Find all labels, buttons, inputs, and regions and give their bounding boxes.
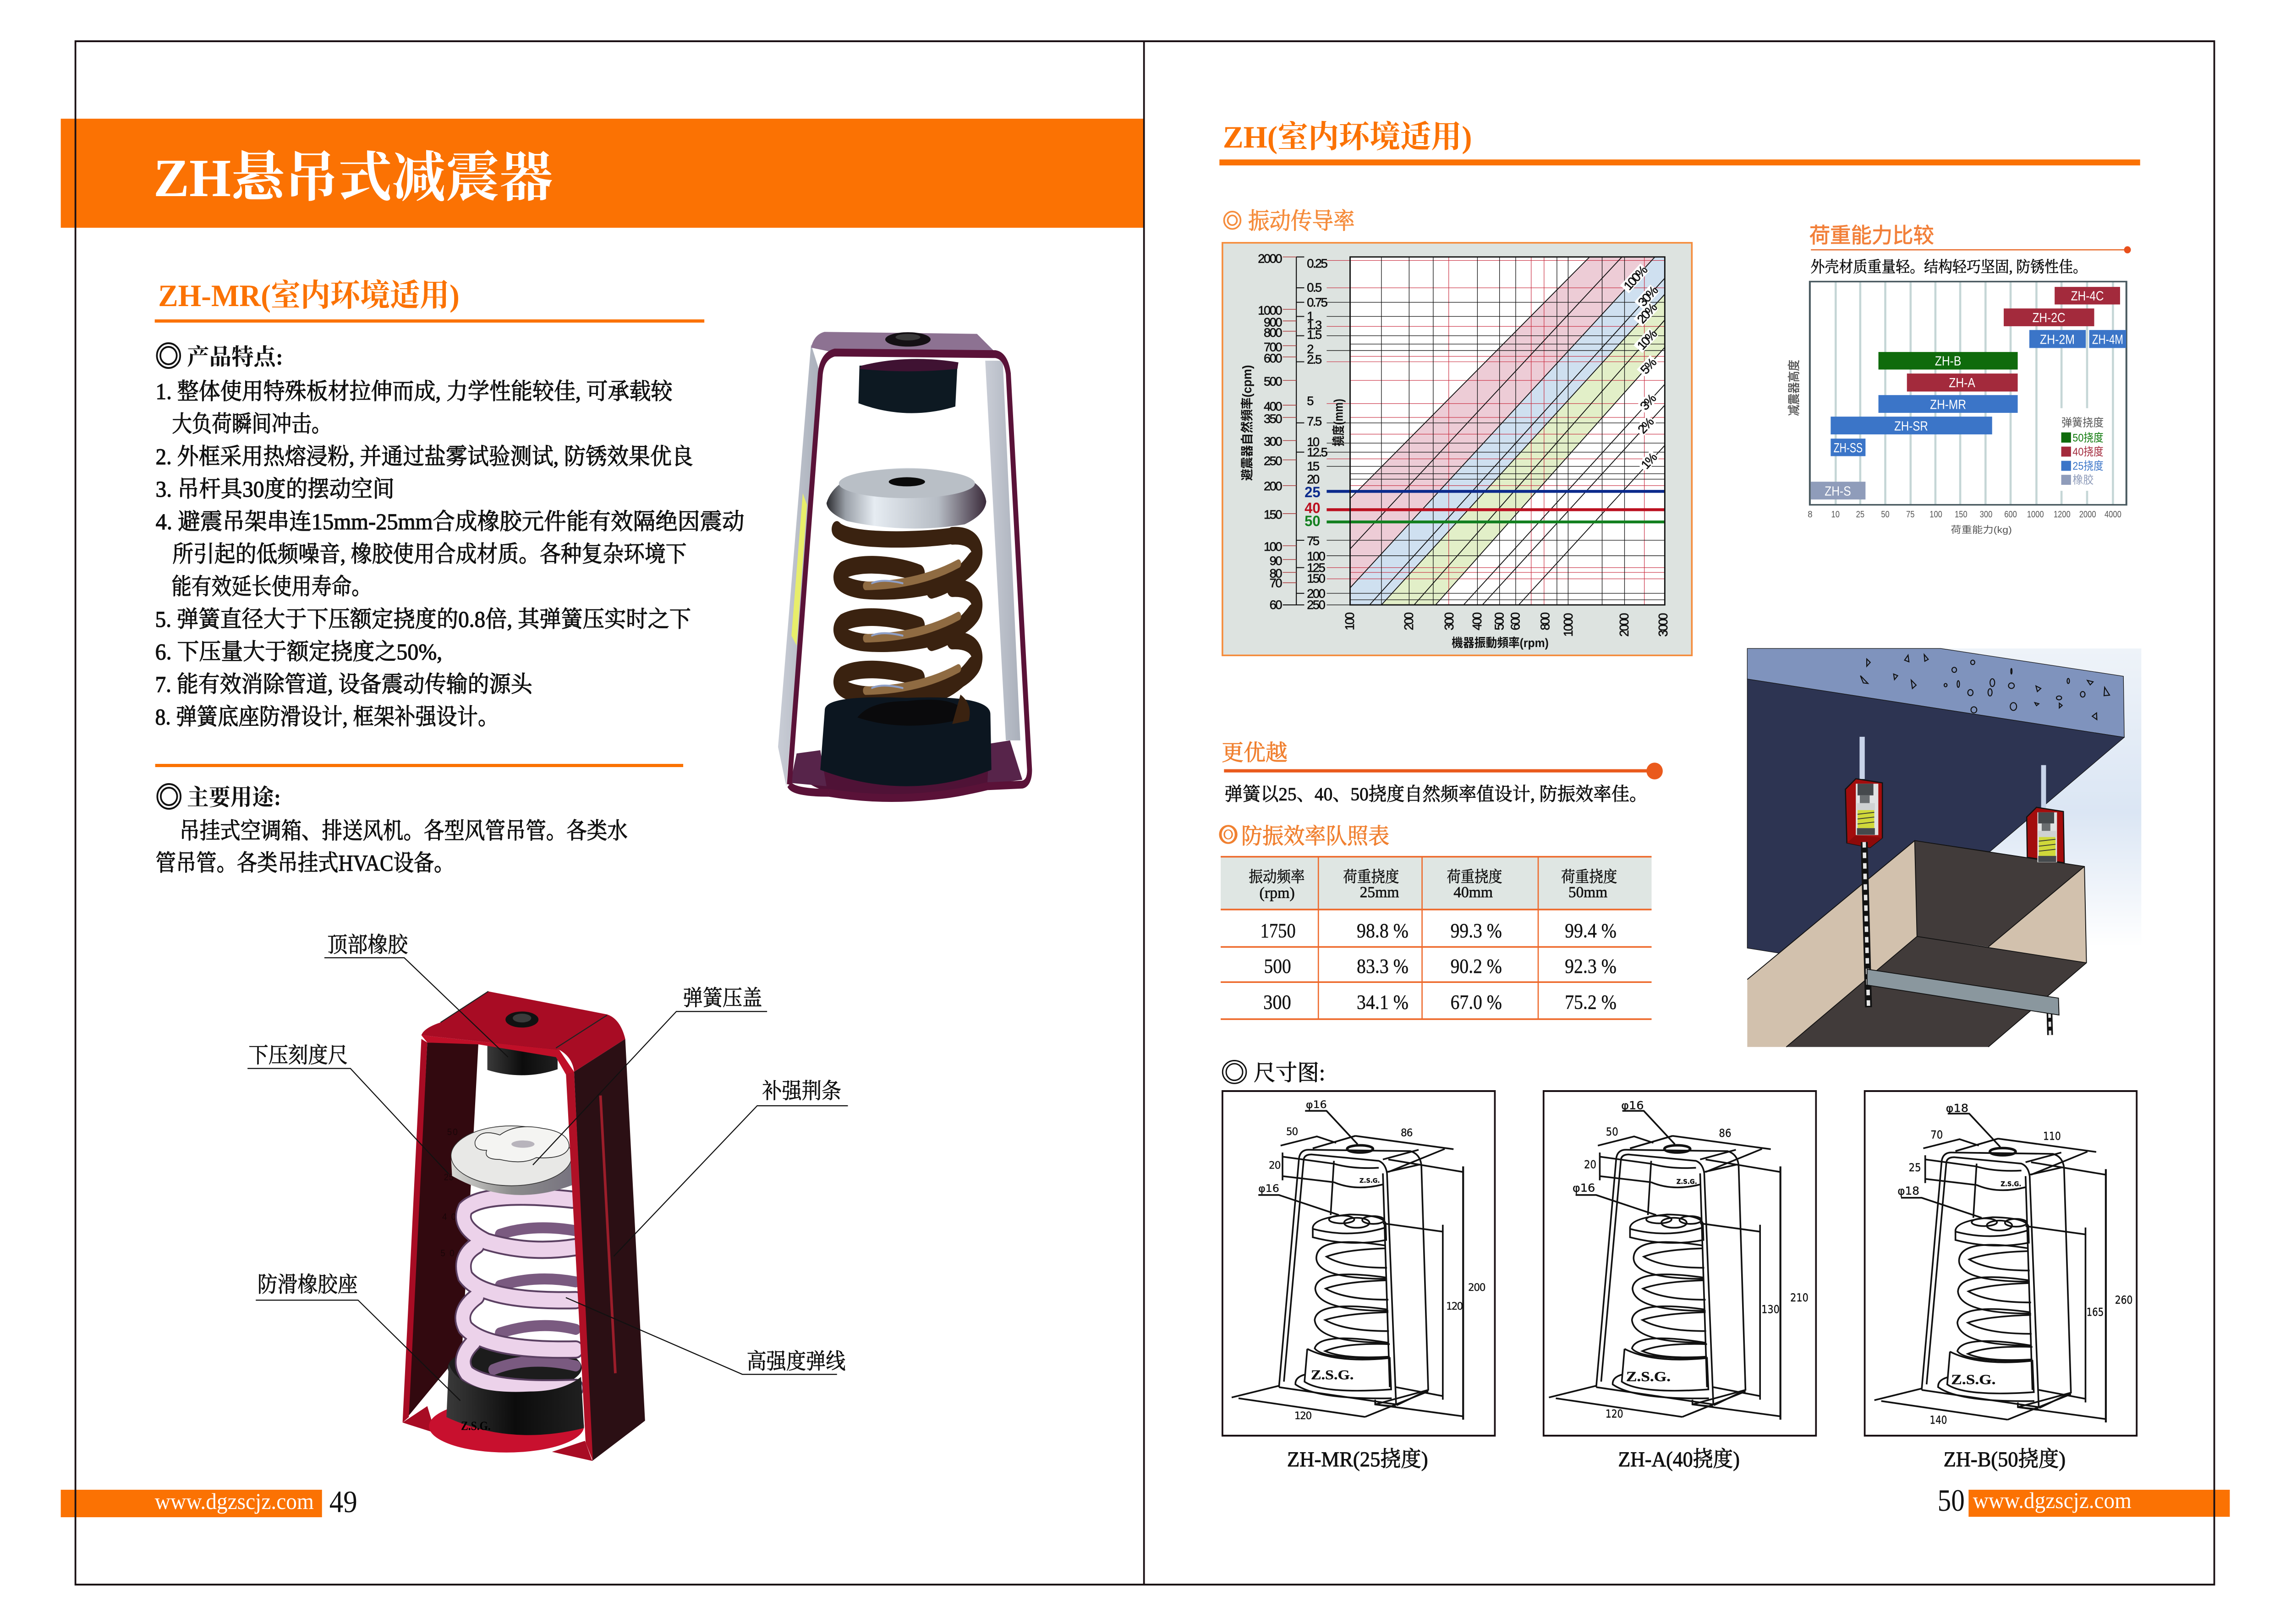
- bars: ZH-SR: [1894, 418, 1928, 433]
- frame strip: [789, 352, 1030, 798]
- axis titles: 機器振動頻率(rpm): [1452, 636, 1549, 650]
- exploded product diagram with callouts: Z.S.G.: [461, 1419, 491, 1433]
- natural frequency scale: 350: [1264, 412, 1282, 426]
- base plate: [802, 745, 1004, 801]
- slab underside: [1747, 679, 2124, 953]
- callout: spring wire: 高强度弹线: [746, 1349, 845, 1374]
- x axis labels: 4000: [2105, 509, 2121, 520]
- table title: 防振效率队照表: [1241, 824, 1389, 849]
- base feet: [403, 1406, 434, 1432]
- dimension drawing: ZH-B: Z.S.G.: [2001, 1180, 2021, 1188]
- footer left: 49: [329, 1485, 357, 1519]
- deflection scale: 15: [1307, 460, 1319, 473]
- bars: ZH-SS: [1834, 440, 1863, 455]
- rubber base: [820, 697, 992, 786]
- caption: ZH-B(50挠度): [1944, 1447, 2066, 1471]
- x axis title: 荷重能力(kg): [1951, 525, 2012, 535]
- footer left: [61, 1485, 357, 1519]
- dimension drawing: ZH-B: 260: [2115, 1293, 2132, 1306]
- dimension drawing: ZH-B: 140: [1929, 1413, 1947, 1426]
- icon: double ring: [1222, 1061, 1246, 1083]
- caption: ZH-MR(25挠度): [1287, 1447, 1428, 1471]
- heading rule: [1811, 246, 2131, 253]
- deflection scale: 7.5: [1307, 415, 1321, 428]
- description: 弹簧以25、40、50挠度自然频率值设计, 防振效率佳。: [1225, 784, 1647, 804]
- x axis labels: 100: [1929, 509, 1942, 520]
- x axis values: 400: [1470, 613, 1484, 631]
- washer: [451, 1150, 572, 1195]
- panel: vibration transmissibility chart: 撓度(mm): [1332, 399, 1346, 446]
- dimension drawing: ZH-A: Z.S.G.: [1677, 1178, 1697, 1185]
- dimension drawing: ZH-MR: [1222, 1091, 1495, 1471]
- chart frame: [1810, 281, 2127, 505]
- base disc: [429, 1400, 584, 1453]
- natural frequency scale: 400: [1264, 400, 1282, 413]
- text block: product features: 8. 弹簧底座防滑设计, 框架补强设计。: [155, 704, 499, 730]
- scale marks: 50: [447, 1127, 458, 1137]
- legend: 50挠度: [2072, 432, 2104, 444]
- threaded rods: [1864, 842, 2050, 1035]
- dimension drawing: ZH-A: 50: [1606, 1125, 1618, 1138]
- percent labels: 5%: [1638, 356, 1659, 377]
- efficiency table: 振动频率: [1249, 868, 1305, 886]
- percent labels: 2%: [1635, 415, 1657, 436]
- legend: 橡胶: [2072, 474, 2094, 486]
- efficiency table: 1750: [1261, 920, 1296, 942]
- x axis values: 300: [1442, 613, 1456, 631]
- deflection scale: 2.5: [1307, 353, 1321, 367]
- highlighted deflection values: 40: [1304, 499, 1321, 516]
- x axis values: 800: [1538, 613, 1552, 631]
- efficiency table: 99.4 %: [1565, 920, 1617, 942]
- chart title: 振动传导率: [1248, 208, 1355, 235]
- text block: main uses: 管吊管。各类吊挂式HVAC设备。: [156, 851, 455, 876]
- dimension drawing: ZH-B: Z.S.G.: [1951, 1372, 1996, 1388]
- efficiency table: [1221, 857, 1651, 1019]
- percent labels: 100%: [1621, 263, 1650, 293]
- dimension drawing: ZH-B: 70: [1930, 1128, 1943, 1141]
- diagonal lines: [1350, 257, 1665, 605]
- dimension drawing: ZH-A: 210: [1790, 1291, 1809, 1304]
- natural frequency scale: 800: [1264, 326, 1282, 340]
- text block: product features: 2. 外框采用热熔浸粉, 并通过盐雾试验测试, 防锈效果优良: [156, 444, 693, 469]
- installation illustration: duct hung from slab: [1747, 648, 2141, 1047]
- bars: ZH-MR: [1930, 397, 1966, 412]
- dimension drawing: ZH-MR: φ16: [1306, 1099, 1327, 1111]
- right heading: [1219, 120, 2140, 165]
- text block: main uses: 主要用途:: [187, 785, 281, 810]
- scale marks: 50: [440, 1248, 455, 1259]
- deflection lines: [1326, 491, 1665, 522]
- percent labels: 10%: [1634, 327, 1660, 352]
- icon: double ring: [157, 784, 181, 809]
- bars: ZH-2M: [2040, 332, 2075, 347]
- efficiency table: 75.2 %: [1565, 991, 1617, 1014]
- deflection scale: 1.3: [1307, 318, 1321, 332]
- x axis labels: 600: [2004, 509, 2017, 520]
- efficiency table: 荷重挠度: [1343, 868, 1399, 886]
- grid: [1326, 257, 1665, 605]
- divider rule: [155, 764, 683, 767]
- text block: product features: 能有效延长使用寿命。: [171, 575, 372, 599]
- front strip: [422, 1035, 574, 1074]
- efficiency table: 34.1 %: [1357, 991, 1409, 1014]
- natural frequency scale: 60: [1270, 598, 1282, 612]
- x axis labels: 8: [1808, 509, 1813, 520]
- x axis labels: 150: [1955, 509, 1968, 520]
- right panel: [574, 1039, 645, 1461]
- natural frequency scale: 600: [1264, 351, 1282, 365]
- dimension drawing: ZH-MR: 20: [1269, 1160, 1281, 1171]
- deflection scale: 0.5: [1307, 281, 1321, 294]
- x axis labels: [1808, 509, 2121, 520]
- deflection scale: 100: [1307, 550, 1325, 563]
- table title: [1220, 824, 1389, 849]
- natural frequency scale: 2000: [1258, 252, 1282, 265]
- footer right: [1938, 1483, 2230, 1518]
- callout: compression scale: 下压刻度尺: [248, 1043, 348, 1067]
- footer right: 50: [1938, 1483, 1965, 1518]
- bars: ZH-4C: [2071, 288, 2104, 303]
- plot border: [1350, 257, 1665, 605]
- deflection scale: 5: [1307, 395, 1313, 408]
- dimension drawing: ZH-A: 20: [1584, 1158, 1596, 1171]
- footer right: www.dgzscjz.com: [1973, 1488, 2132, 1513]
- dimension drawing: ZH-MR: φ16: [1258, 1183, 1279, 1195]
- efficiency table: 98.8 %: [1357, 920, 1409, 942]
- deflection scale: 1: [1307, 309, 1313, 323]
- natural frequency scale: 200: [1264, 480, 1282, 493]
- spring coils: [837, 529, 977, 696]
- dimension drawing: ZH-A: 120: [1606, 1407, 1623, 1420]
- bars: ZH-B: [1935, 353, 1961, 368]
- concrete slab face: [1747, 648, 2124, 737]
- x axis labels: 25: [1856, 509, 1864, 520]
- dimension drawing: ZH-B: 110: [2043, 1130, 2061, 1142]
- natural frequency scale: 1000: [1258, 304, 1282, 317]
- x axis values: 1000: [1561, 614, 1575, 637]
- left heading: [155, 279, 704, 323]
- background sky: [1940, 648, 2141, 947]
- efficiency table: 荷重挠度: [1447, 868, 1502, 886]
- dimension drawing: ZH-A: 86: [1719, 1126, 1731, 1140]
- washer: [827, 468, 986, 528]
- dimension drawing: ZH-MR: 50: [1286, 1126, 1298, 1138]
- heading: 更优越: [1222, 741, 1288, 765]
- legend: [2058, 408, 2108, 491]
- dimension drawing: ZH-MR: 200: [1468, 1282, 1485, 1294]
- text block: product features: 6. 下压量大于额定挠度之50%,: [155, 639, 442, 664]
- exploded product diagram with callouts: [247, 933, 848, 1461]
- highlighted deflection values: [1304, 483, 1321, 529]
- efficiency table: 90.2 %: [1451, 955, 1502, 977]
- bars: ZH-2C: [2033, 310, 2065, 325]
- efficiency table: 67.0 %: [1451, 991, 1502, 1014]
- dimension drawing: ZH-B: [1865, 1091, 2137, 1471]
- title banner: [61, 119, 1144, 228]
- x axis labels: 1000: [2027, 509, 2044, 520]
- x axis values: 100: [1343, 613, 1357, 631]
- text block: product features: 3. 吊杆具30度的摆动空间: [156, 477, 395, 502]
- efficiency table: 50mm: [1568, 884, 1607, 901]
- x axis values: 3000: [1656, 614, 1670, 637]
- dimension drawing: ZH-A: 130: [1761, 1302, 1780, 1316]
- text block: product features: 5. 弹簧直径大于下压额定挠度的0.8倍, 其弹簧压实时之下: [155, 607, 691, 632]
- dimension drawing: ZH-A: φ16: [1621, 1099, 1644, 1112]
- highlighted deflection values: 25: [1304, 483, 1321, 500]
- frame back panels: [778, 344, 820, 786]
- dimension drawing: ZH-B: φ18: [1897, 1184, 1919, 1197]
- natural frequency scale: 100: [1264, 540, 1282, 554]
- caption: ZH-A(40挠度): [1618, 1447, 1740, 1471]
- description: 外壳材质重量轻。结构轻巧坚固, 防锈性佳。: [1811, 258, 2087, 276]
- callout: anti-slip seat: 防滑橡胶座: [258, 1273, 358, 1297]
- text block: product features: 所引起的低频噪音, 橡胶使用合成材质。各种复杂环境下: [172, 542, 687, 567]
- dimension drawing: ZH-MR: Z.S.G.: [1359, 1178, 1380, 1185]
- efficiency table: 500: [1264, 955, 1291, 977]
- highlighted deflection values: 50: [1304, 513, 1321, 529]
- efficiency bands: [1350, 257, 1665, 605]
- panel: load capacity comparison: [1787, 224, 2131, 535]
- dimension drawing: ZH-MR: 86: [1401, 1127, 1413, 1139]
- text block: product features: 1. 整体使用特殊板材拉伸而成, 力学性能较佳, 可承载较: [156, 379, 673, 404]
- scale marks: [440, 1127, 458, 1259]
- panel: better performance and efficiency table: [1220, 741, 1663, 1019]
- panel: vibration transmissibility chart: [1222, 208, 1692, 655]
- x axis labels: 50: [1881, 509, 1890, 520]
- heading: dimension drawings: 尺寸图:: [1254, 1061, 1325, 1086]
- efficiency table: 83.3 %: [1357, 955, 1409, 977]
- product photo: spring hanger: [778, 332, 1030, 801]
- natural frequency scale: 300: [1264, 435, 1282, 449]
- dimension drawing: ZH-A: φ16: [1573, 1181, 1595, 1194]
- legend: 40挠度: [2072, 445, 2104, 458]
- natural frequency scale: 150: [1264, 508, 1282, 521]
- hanger right: [2027, 765, 2064, 863]
- natural frequency scale: 90: [1270, 554, 1282, 568]
- left inner panel: [407, 1042, 478, 1417]
- text block: product features: 大负荷瞬间冲击。: [172, 412, 331, 437]
- natural frequency scale: 700: [1264, 340, 1282, 354]
- deflection scale: 10: [1307, 435, 1319, 449]
- deflection scale: [1307, 257, 1327, 612]
- text block: product features: 4. 避震吊架串连15mm-25mm合成橡胶元件能有效隔绝因震动: [156, 510, 745, 534]
- efficiency table: 300: [1263, 991, 1291, 1014]
- deflection scale: 75: [1307, 534, 1319, 548]
- x axis values: [1343, 613, 1670, 637]
- text block: product features: [155, 343, 745, 730]
- support bar: [1867, 969, 2059, 1015]
- x axis values: 600: [1508, 613, 1523, 631]
- natural frequency scale: 500: [1264, 375, 1282, 388]
- dimension drawing: ZH-A: [1544, 1091, 1816, 1471]
- percent labels: 1%: [1639, 450, 1660, 472]
- efficiency table: 40mm: [1453, 884, 1493, 901]
- right heading: ZH(室内环境适用): [1223, 120, 1472, 154]
- dimension drawing: ZH-B: φ18: [1946, 1101, 1968, 1114]
- efficiency table: (rpm): [1260, 884, 1295, 901]
- efficiency table: 99.3 %: [1451, 920, 1502, 942]
- deflection scale: 0.75: [1307, 296, 1327, 309]
- hanger left: [1846, 737, 1882, 848]
- bars: ZH-S: [1825, 483, 1851, 499]
- x axis labels: 1200: [2054, 509, 2071, 520]
- top plate: [422, 991, 625, 1072]
- chart background: [1222, 243, 1692, 655]
- natural frequency scale: 250: [1264, 454, 1282, 468]
- dimension drawing: ZH-A: Z.S.G.: [1626, 1369, 1671, 1384]
- callout: top rubber: 顶部橡胶: [327, 933, 408, 957]
- bars: ZH-4M: [2092, 332, 2123, 347]
- efficiency table: 92.3 %: [1565, 955, 1617, 977]
- callout: reinforcing rib: 补强荆条: [762, 1079, 841, 1103]
- natural frequency scale: 80: [1270, 567, 1282, 580]
- x axis labels: 2000: [2079, 509, 2096, 520]
- x axis labels: 75: [1906, 509, 1914, 520]
- deflection scale: 2: [1307, 343, 1313, 356]
- title banner: ZH悬吊式减震器: [153, 148, 553, 208]
- deflection scale: 12.5: [1307, 445, 1327, 459]
- heading rule: [1224, 763, 1663, 779]
- panel: vibration transmissibility chart: 避震器自然頻率(cpm): [1240, 365, 1254, 481]
- x axis values: 200: [1402, 613, 1416, 631]
- text block: product features: 7. 能有效消除管道, 设备震动传输的源头: [155, 672, 533, 697]
- x axis values: 2000: [1617, 614, 1631, 637]
- text block: main uses: 吊挂式空调箱、排送风机。各型风管吊管。各类水: [179, 819, 628, 844]
- x axis values: 500: [1492, 613, 1506, 631]
- rubber seat front: [446, 1364, 584, 1435]
- slab holes: [1860, 654, 2110, 719]
- dimension drawing: ZH-B: 165: [2087, 1306, 2104, 1318]
- natural frequency scale: [1258, 252, 1282, 612]
- deflection scale: 150: [1307, 572, 1325, 586]
- left heading: ZH-MR(室内环境适用): [158, 279, 460, 313]
- top rubber: [488, 1042, 558, 1075]
- natural frequency scale: 70: [1270, 576, 1282, 590]
- efficiency table: 25mm: [1360, 884, 1399, 901]
- x axis labels: 10: [1831, 509, 1840, 520]
- natural frequency scale: 900: [1264, 316, 1282, 329]
- icon: double ring: [157, 343, 180, 368]
- red frame strips: [403, 1039, 428, 1422]
- scale marks: 40: [442, 1212, 456, 1222]
- y axis title: 减震器高度: [1787, 360, 1801, 416]
- dimension drawing: ZH-MR: Z.S.G.: [1311, 1368, 1354, 1383]
- deflection scale: 125: [1307, 561, 1325, 575]
- y axis and ticks: [1283, 257, 1304, 605]
- legend: 弹簧挠度: [2061, 417, 2104, 429]
- percent labels: [1620, 263, 1661, 473]
- dimension drawing: ZH-MR: 120: [1446, 1301, 1463, 1312]
- callout leader lines: [247, 958, 848, 1401]
- footer left: www.dgzscjz.com: [155, 1489, 314, 1514]
- callout: spring cap: 弹簧压盖: [683, 986, 762, 1010]
- duct left face: [1747, 840, 1917, 1047]
- spring: [463, 1196, 576, 1388]
- percent labels: 20%: [1634, 301, 1660, 326]
- percent labels: 3%: [1637, 391, 1659, 413]
- legend: 25挠度: [2072, 460, 2104, 472]
- top rubber: [859, 366, 957, 413]
- dimension drawing: ZH-B: 25: [1909, 1161, 1921, 1174]
- dimension drawing: ZH-MR: 120: [1294, 1410, 1312, 1422]
- deflection scale: 20: [1307, 472, 1319, 486]
- efficiency table: 荷重挠度: [1561, 868, 1617, 886]
- rubber seat: [448, 1344, 582, 1392]
- bars: [1811, 287, 2126, 499]
- deflection scale: 250: [1307, 598, 1325, 612]
- deflection scale: 0.25: [1307, 257, 1327, 270]
- x axis labels: 300: [1980, 509, 1992, 520]
- top nut: [885, 332, 931, 346]
- heading: 荷重能力比较: [1809, 224, 1934, 247]
- percent labels: 30%: [1635, 284, 1661, 309]
- deflection scale: 200: [1307, 587, 1325, 601]
- text block: product features: 产品特点:: [187, 345, 283, 370]
- scale marks: 25: [444, 1172, 454, 1183]
- duct interior: [1915, 840, 2084, 947]
- text block: main uses: [156, 784, 628, 876]
- deflection scale: 1.5: [1307, 328, 1321, 342]
- bars: ZH-A: [1949, 375, 1975, 390]
- heading: dimension drawings: [1222, 1061, 1325, 1086]
